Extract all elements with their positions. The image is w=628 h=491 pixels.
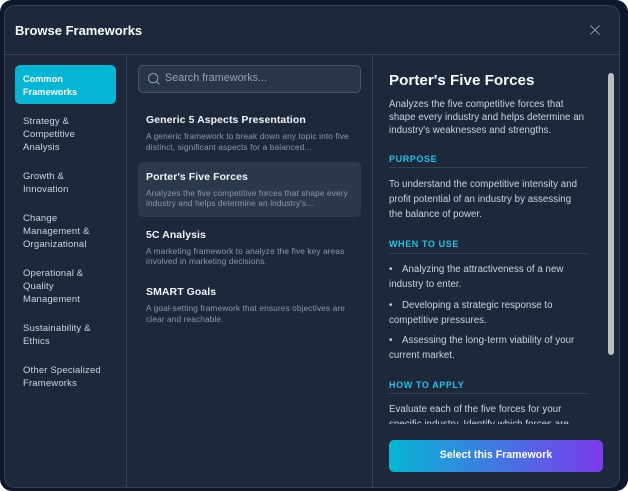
category: Change Management & Organizational (23, 213, 90, 250)
category: Growth & Innovation: Innovation (23, 184, 69, 195)
section heading: how to apply: HOW TO APPLY (389, 380, 464, 390)
list item selected: Porter's Five Forces: Analyzes the five competitive forces that shape every (146, 188, 348, 198)
bullet list: when to use: • (389, 300, 392, 311)
category: Sustainability & Ethics (23, 323, 91, 347)
purpose text (389, 179, 577, 220)
category list (15, 65, 116, 389)
bullet list: when to use: • (389, 335, 392, 346)
category: Change Management & Organizational: Management & (23, 226, 89, 237)
category: Strategy & Competitive Analysis: Analysis (23, 142, 60, 153)
section heading: purpose: PURPOSE (389, 154, 437, 164)
list item: SMART Goals: A goal-setting framework that ensures objectives are (146, 303, 345, 313)
list item: Generic 5 Aspects Presentation (146, 114, 349, 152)
bullet list: when to use: industry to enter. (389, 279, 461, 290)
list item: 5C Analysis: involved in marketing decisions. (146, 256, 267, 266)
search box (138, 65, 361, 93)
active category: Common Frameworks (15, 65, 116, 104)
category: Sustainability & Ethics: Sustainability & (23, 323, 91, 334)
how to apply text (389, 404, 569, 424)
section heading: when to use: WHEN TO USE (389, 239, 459, 249)
category: Other Specialized Frameworks: Other Specialized (23, 365, 101, 376)
icon: search (148, 73, 160, 85)
purpose text: the balance of power. (389, 209, 482, 220)
list item selected: Porter's Five Forces: Porter's Five Forces (146, 171, 248, 183)
category: Strategy & Competitive Analysis: Competitive (23, 129, 75, 140)
list item: 5C Analysis: 5C Analysis (146, 229, 206, 241)
category: Strategy & Competitive Analysis (23, 116, 75, 153)
list item: 5C Analysis: A marketing framework to analyze the five key areas (146, 246, 344, 256)
list item: SMART Goals (146, 286, 345, 324)
icon: close (590, 25, 600, 35)
details heading: Porter's Five Forces (389, 72, 534, 89)
panel: framework details (389, 72, 588, 424)
purpose text: profit potential of an industry by assessing (389, 194, 571, 205)
category: Operational & Quality Management: Quality (23, 281, 54, 292)
category: Sustainability & Ethics: Ethics (23, 336, 50, 347)
bullet list: when to use (389, 264, 574, 361)
panel: framework list (127, 55, 373, 487)
category: Strategy & Competitive Analysis: Strategy & (23, 116, 69, 127)
bullet list: when to use: Developing a strategic response to (402, 300, 553, 311)
category: Growth & Innovation: Growth & (23, 171, 64, 182)
category: Change Management & Organizational: Organizational (23, 239, 87, 250)
bullet list: when to use: • (389, 264, 392, 275)
list item: Generic 5 Aspects Presentation: distinct, significant aspects for a balanced... (146, 142, 312, 152)
list item selected: Porter's Five Forces (138, 162, 361, 217)
details summary: Analyzes the five competitive forces that (389, 99, 563, 110)
list item: 5C Analysis (146, 229, 344, 266)
bullet list: when to use: current market. (389, 350, 455, 361)
panel: category sidebar (5, 55, 127, 487)
category: Change Management & Organizational: Change (23, 213, 57, 224)
list item: Generic 5 Aspects Presentation: Generic 5 Aspects Presentation (146, 114, 306, 126)
purpose text: To understand the competitive intensity and (389, 179, 577, 190)
bullet list: when to use: Analyzing the attractiveness of a new (402, 264, 563, 275)
list item: Generic 5 Aspects Presentation: A generic framework to break down any topic into five (146, 131, 349, 141)
bullet list: when to use: competitive pressures. (389, 315, 487, 326)
details summary: shape every industry and helps determine an (389, 112, 584, 123)
how to apply text: Evaluate each of the five forces for your (389, 404, 561, 415)
details summary (389, 99, 584, 136)
category: Other Specialized Frameworks: Frameworks (23, 378, 77, 389)
category: Operational & Quality Management: Operational & (23, 268, 83, 279)
active category: Common Frameworks: Common (23, 74, 63, 84)
list item: SMART Goals: clear and reachable. (146, 314, 224, 324)
button: Select this Framework: Select this Framework (440, 449, 552, 461)
active category: Common Frameworks: Frameworks (23, 87, 77, 97)
bullet list: when to use: Assessing the long-term viability of your (402, 335, 574, 346)
category: Other Specialized Frameworks (23, 365, 101, 389)
search box: Search frameworks... (165, 72, 267, 84)
list item: SMART Goals: SMART Goals (146, 286, 216, 298)
details summary: industry's weaknesses and strengths. (389, 125, 551, 136)
list item selected: Porter's Five Forces: industry and helps determine an industry's... (146, 198, 313, 208)
category: Operational & Quality Management: Management (23, 294, 80, 305)
category: Operational & Quality Management (23, 268, 83, 305)
dialog header (5, 6, 619, 55)
title: Browse Frameworks (15, 23, 142, 38)
button: Select this Framework (389, 440, 603, 472)
scrollbar (608, 73, 614, 355)
category: Growth & Innovation (23, 171, 69, 195)
